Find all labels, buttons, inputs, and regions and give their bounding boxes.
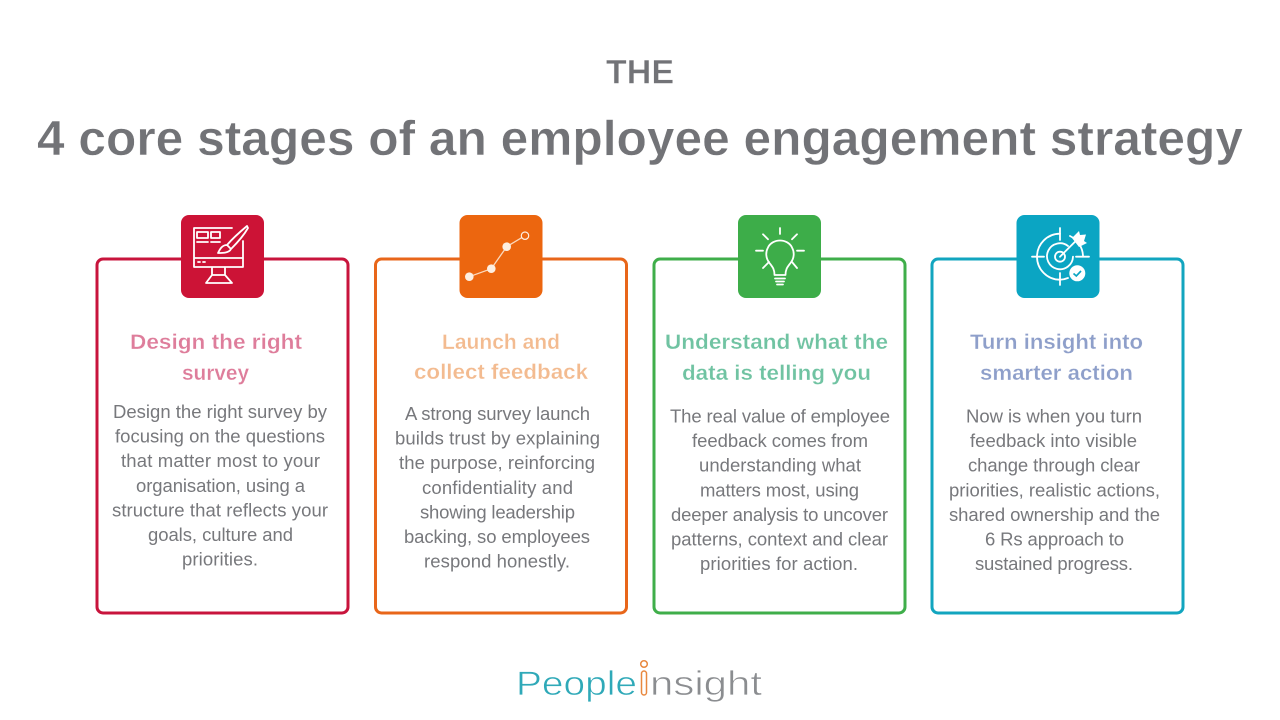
body text: backing, so employees: [404, 526, 590, 547]
body text: priorities.: [182, 549, 258, 570]
body text: focusing on the questions: [115, 426, 325, 447]
logo: People Insight: [516, 661, 763, 703]
heading: smarter action: [980, 362, 1133, 385]
icon: monitor and paintbrush: [181, 215, 264, 298]
page title: 4 core stages of an employee engagement strategy: [37, 112, 1243, 166]
heading: [414, 331, 588, 384]
body text: The real value of employee: [670, 406, 890, 426]
body text: the purpose, reinforcing: [399, 452, 595, 473]
heading: collect feedback: [414, 361, 588, 384]
body text: Design the right survey by: [113, 401, 328, 422]
heading: [970, 331, 1143, 385]
icon: target with arrow: [1016, 215, 1100, 298]
body text: shared ownership and the: [949, 504, 1160, 525]
page title: THE: [606, 54, 674, 92]
body text: respond honestly.: [424, 551, 570, 572]
icon: rising line chart: [460, 215, 542, 298]
body text: confidentiality and: [422, 477, 573, 498]
body text: matters most, using: [700, 479, 859, 500]
body text: understanding what: [699, 455, 861, 476]
logo: People Insight: nsight: [650, 665, 763, 703]
body text: change through clear: [968, 455, 1140, 476]
body text: sustained progress.: [975, 553, 1133, 574]
body text: [670, 406, 890, 574]
body text: Now is when you turn: [966, 406, 1142, 426]
panel: turn insight into smarter action: [932, 215, 1183, 613]
body text: [949, 406, 1160, 574]
heading: Launch and: [442, 331, 560, 354]
body text: feedback into visible: [970, 430, 1137, 451]
body text: structure that reflects your: [112, 499, 328, 520]
body text: A strong survey launch: [405, 403, 590, 424]
body text: [112, 401, 328, 570]
body text: that matter most to your: [121, 450, 320, 471]
panel: understand what the data is telling you: [654, 215, 905, 613]
body text: builds trust by explaining: [395, 428, 600, 449]
body text: priorities, realistic actions,: [949, 479, 1160, 500]
body text: patterns, context and clear: [671, 528, 888, 550]
heading: [665, 331, 888, 385]
body text: organisation, using a: [136, 475, 306, 496]
page title: [37, 54, 1243, 166]
heading: Design the right: [130, 331, 302, 354]
panel: launch and collect feedback: [376, 215, 626, 613]
logo: People Insight: People: [516, 665, 637, 703]
panel: design the right survey: [97, 215, 348, 613]
body text: feedback comes from: [692, 430, 868, 451]
heading: survey: [182, 362, 249, 385]
heading: Turn insight into: [970, 331, 1143, 354]
body text: priorities for action.: [700, 553, 858, 574]
heading: data is telling you: [682, 362, 871, 385]
icon: light bulb: [738, 215, 821, 298]
body text: goals, culture and: [148, 524, 293, 545]
body text: showing leadership: [420, 501, 575, 522]
heading: [130, 331, 302, 385]
heading: Understand what the: [665, 331, 888, 354]
body text: [395, 403, 600, 572]
body text: deeper analysis to uncover: [671, 504, 888, 525]
body text: 6 Rs approach to: [985, 528, 1124, 550]
